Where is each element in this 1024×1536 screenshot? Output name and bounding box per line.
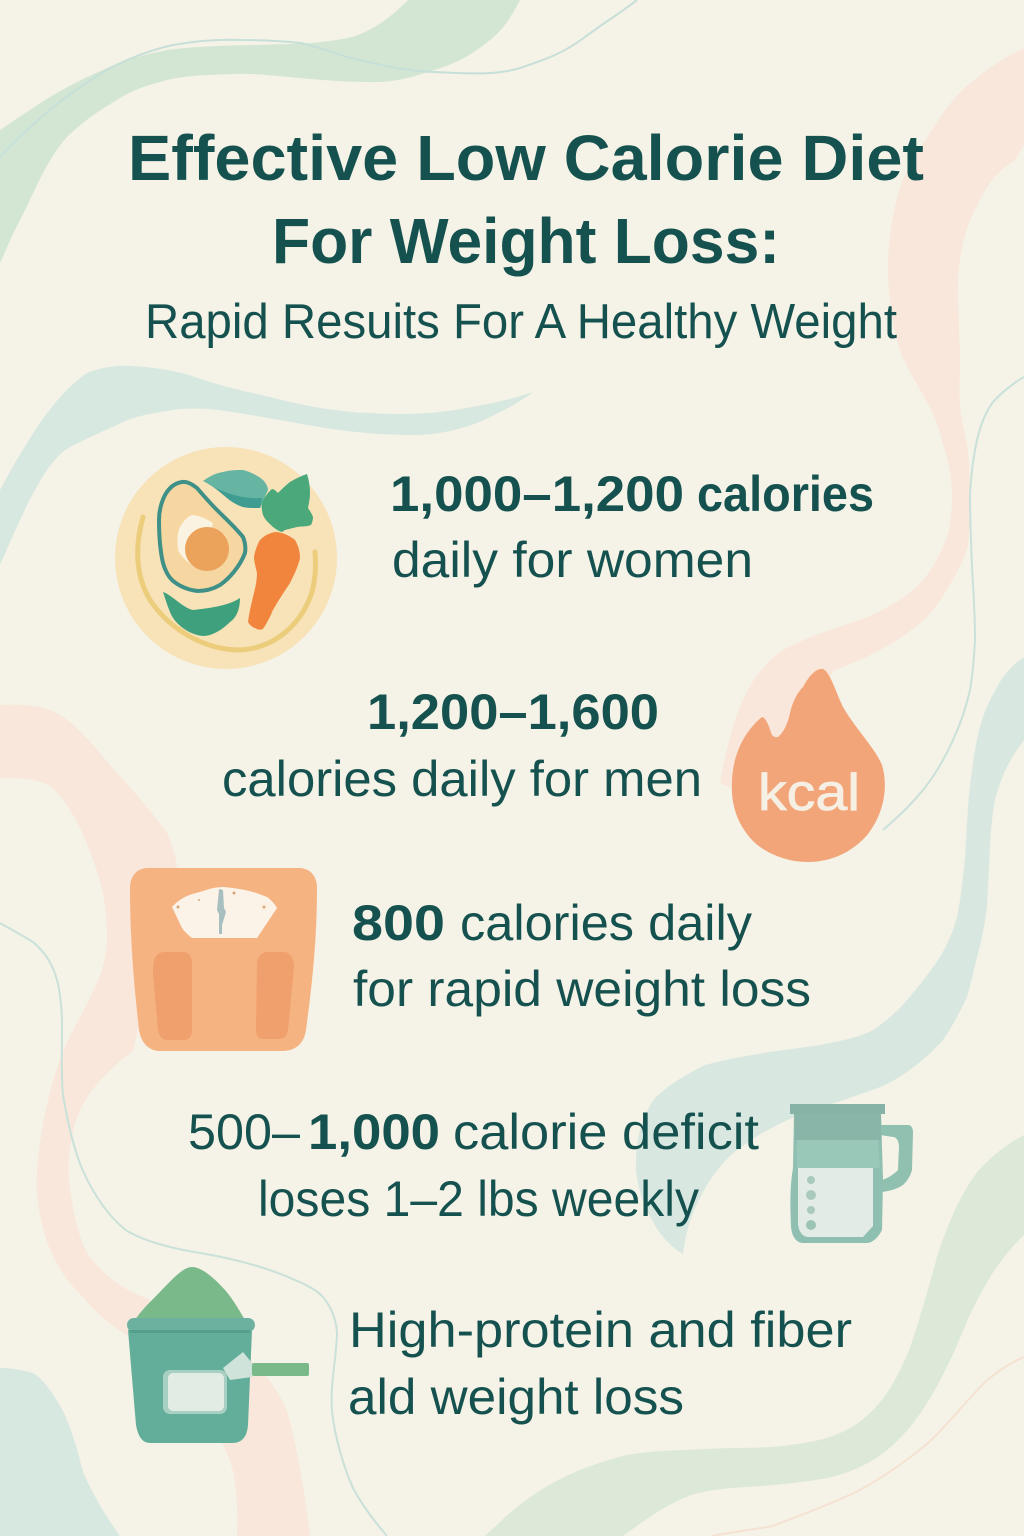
text: men calories [222,684,702,807]
text: calorie deficit [188,1104,759,1227]
text: calorie deficit: 1,000 [308,1104,440,1160]
text: men calories: calories daily for men [222,751,702,807]
text: rapid weight loss [352,895,811,1017]
subtitle: Rapid Resuits For A Healthy Weight [145,295,897,349]
text: women calories: calories [697,466,874,522]
text: protein and fiber: High-protein and fiber [349,1302,852,1358]
text: protein and fiber [348,1302,852,1425]
icon: bathroom scale [130,868,317,1051]
text: men calories: 1,200–1,600 [367,684,659,740]
text: women calories: 1,000–1,200 [390,466,684,522]
text: protein and fiber: ald weight loss [348,1369,684,1425]
text: calorie deficit: loses 1–2 lbs weekly [258,1171,699,1227]
icon: protein powder tub [127,1267,309,1443]
text: women calories [390,466,874,588]
title: For Weight Loss: [272,205,780,277]
title [128,122,924,277]
icon: kcal flame [732,669,885,862]
text: rapid weight loss: calories daily [460,895,752,951]
avocado yolk [185,527,229,571]
text: women calories: daily for women [392,532,753,588]
text: calorie deficit: 500– [188,1104,300,1160]
icon: measuring jug [790,1104,913,1243]
icon: plate of food [115,447,337,669]
icon: kcal flame: kcal [758,764,860,822]
title: Effective Low Calorie Diet [128,122,924,194]
text: calorie deficit: calorie deficit [453,1104,759,1160]
text: rapid weight loss: for rapid weight loss [353,961,811,1017]
text: rapid weight loss: 800 [352,895,445,951]
